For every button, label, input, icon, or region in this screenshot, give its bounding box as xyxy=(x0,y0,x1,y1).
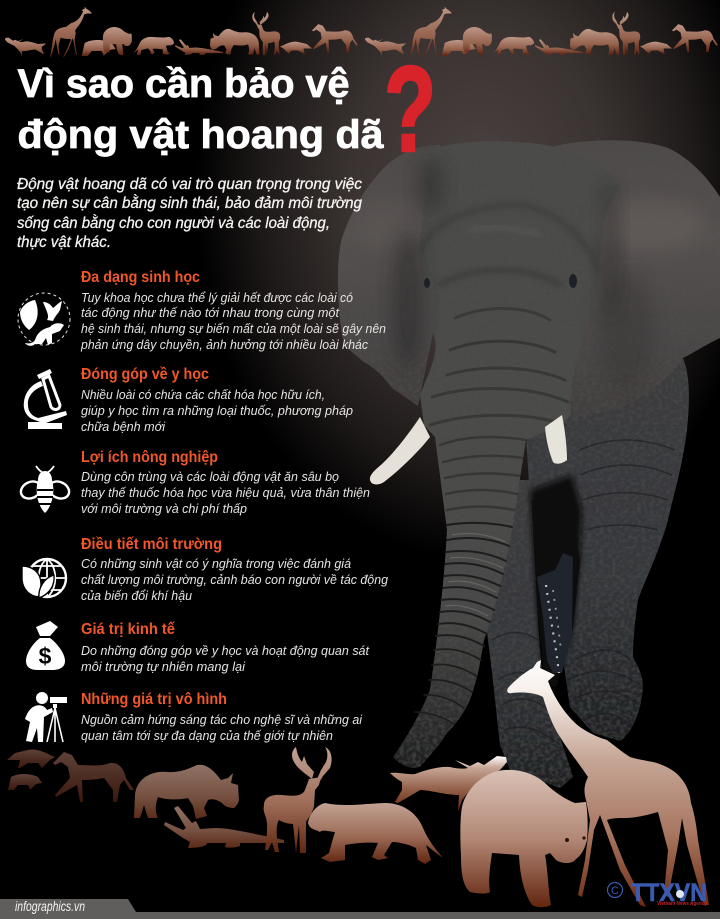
intro text xyxy=(17,176,362,251)
section: environment xyxy=(22,536,389,603)
section: medicine xyxy=(24,366,353,434)
text: medicine: Nhiều loài có chứa các chất hóa học hữu ích, xyxy=(81,387,325,402)
section: biodiversity xyxy=(18,269,386,352)
text: agriculture: thay thế thuốc hóa học vừa hiệu quả, vừa thân thiện xyxy=(81,485,370,500)
elephant right leg and chest xyxy=(525,358,689,741)
top animal strip xyxy=(5,7,718,57)
elephant left ear xyxy=(338,145,450,406)
title: động vật hoang dã xyxy=(18,113,384,157)
elephant photo xyxy=(338,140,720,788)
title: Vì sao cần bảo vệ xyxy=(18,62,350,106)
icon: leaf, dove and ferret xyxy=(18,293,70,346)
heading: environment: Điều tiết môi trường xyxy=(81,536,222,553)
left tusk xyxy=(370,417,430,484)
gap between legs xyxy=(530,475,582,690)
heading: economy: Giá trị kinh tế xyxy=(81,621,175,638)
text: biodiversity xyxy=(80,290,386,352)
deer xyxy=(264,747,332,853)
icon: globe and leaves xyxy=(22,559,66,598)
text: biodiversity: Tuy khoa học chưa thể lý giải hết được các loài có xyxy=(81,290,354,305)
text: medicine: giúp y học tìm ra những loại thuốc, phương pháp xyxy=(81,403,353,418)
TTXVN logo: Vietnam News Agency xyxy=(657,901,708,907)
giraffe xyxy=(507,660,709,907)
leg wrinkles xyxy=(492,440,675,745)
text: agriculture: Dùng côn trùng và các loài động vật ăn sâu bọ xyxy=(81,469,339,484)
heading: medicine: Đóng góp về y học xyxy=(81,366,209,383)
heading: agriculture: Lợi ích nông nghiệp xyxy=(81,449,218,466)
text: environment: Có những sinh vật có ý nghĩa trong việc đánh giá xyxy=(81,556,351,571)
text: economy: môi trường tự nhiên mang lại xyxy=(81,659,246,674)
bottom animals xyxy=(7,660,709,907)
intro text: tạo nên sự cân bằng sinh thái, bảo đảm môi trường xyxy=(17,195,362,212)
text: environment: chất lượng môi trường, cảnh báo con người về tác động xyxy=(81,572,389,587)
section: agriculture xyxy=(18,449,370,516)
text: economy: Do những đóng góp về y học và hoạt động quan sát xyxy=(81,643,370,658)
text: agriculture xyxy=(81,469,370,516)
text: agriculture: với môi trường và chi phí thấp xyxy=(81,501,247,516)
icon: money bag xyxy=(26,621,65,670)
text: biodiversity: hệ sinh thái, nhưng sự biến mất của một loài sẽ gây nên xyxy=(81,321,386,336)
footer bar xyxy=(0,899,720,919)
section: intangible values xyxy=(25,691,363,743)
intro text: sống cân bằng cho con người và các loài động, xyxy=(17,215,330,232)
badger xyxy=(8,774,42,790)
elephant trunk xyxy=(393,420,540,768)
text: economy xyxy=(81,643,370,674)
bear xyxy=(460,770,588,907)
icon: microscope xyxy=(24,369,67,429)
heading: intangible values: Những giá trị vô hình xyxy=(81,691,227,708)
text: intangible values: quan tâm tới sự đa dạng của thế giới tự nhiên xyxy=(81,728,333,743)
heading: biodiversity: Đa dạng sinh học xyxy=(81,269,200,286)
text: biodiversity: phản ứng dây chuyền, ảnh hưởng tới nhiều loài khác xyxy=(80,337,368,352)
intro text: thực vật khác. xyxy=(17,234,111,251)
source label: infographics.vn xyxy=(15,899,85,914)
text: medicine xyxy=(81,387,353,434)
elephant left leg xyxy=(485,480,573,788)
title xyxy=(18,62,384,157)
TTXVN logo: C xyxy=(611,885,619,897)
icon: photographer xyxy=(25,692,67,742)
trunk highlights xyxy=(445,534,506,616)
text: intangible values: Nguồn cảm hứng sáng tác cho nghệ sĩ và những ai xyxy=(81,712,363,727)
icon: bee xyxy=(18,466,72,513)
TTXVN logo: TTXVN xyxy=(631,879,707,907)
intro text: Động vật hoang dã có vai trò quan trọng trong việc xyxy=(17,176,362,193)
text: environment xyxy=(81,556,389,603)
right tusk xyxy=(545,415,567,464)
text: medicine: chữa bệnh mới xyxy=(81,419,166,434)
ear and head shading xyxy=(388,160,696,376)
text: biodiversity: tác động như thế nào tới nhau trong cùng một xyxy=(81,305,340,320)
gazelle xyxy=(390,756,507,812)
horse xyxy=(53,752,134,802)
rhino xyxy=(134,765,239,819)
elephant tail xyxy=(537,553,573,673)
head wrinkles xyxy=(420,205,598,425)
elephant head xyxy=(420,141,622,530)
trunk wrinkles xyxy=(415,437,526,724)
eyes xyxy=(424,274,577,288)
crocodile xyxy=(164,806,284,848)
icon: money bag: $ xyxy=(39,643,52,669)
section: economy xyxy=(26,621,370,674)
wolf xyxy=(7,749,55,768)
text: intangible values xyxy=(81,712,363,743)
red question mark: ? xyxy=(384,42,436,178)
tiger xyxy=(308,803,443,864)
elephant right ear xyxy=(555,140,720,418)
text: environment: của biến đổi khí hậu xyxy=(81,588,193,603)
